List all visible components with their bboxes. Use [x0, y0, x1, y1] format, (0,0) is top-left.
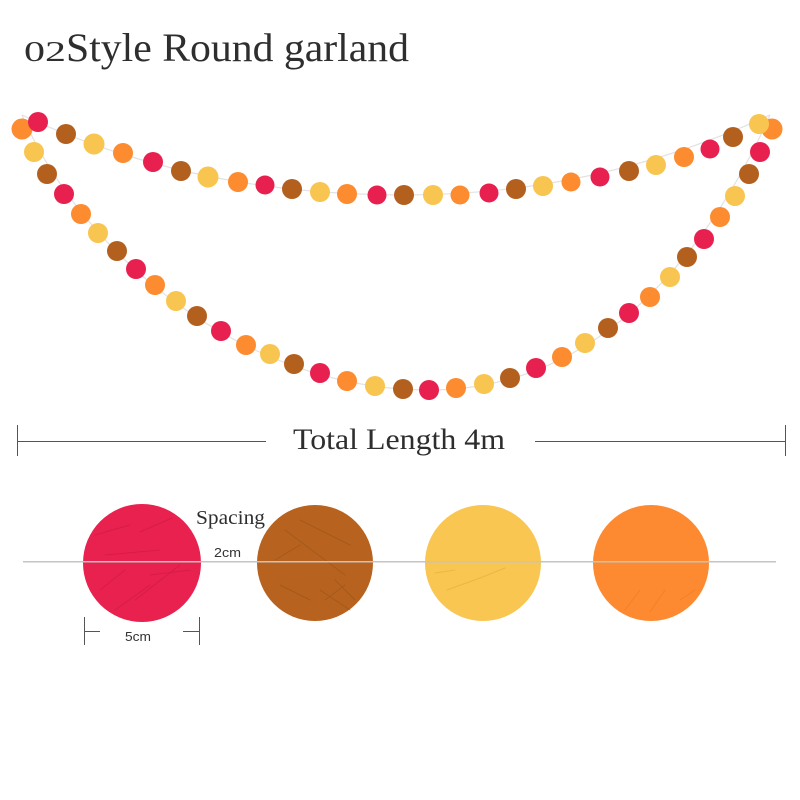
title: 02 — [24, 36, 66, 68]
2cm label: 2cm — [214, 545, 241, 560]
red sample disc — [83, 504, 201, 622]
total length label: Total Length 4m — [293, 423, 505, 456]
string line through discs — [23, 561, 776, 562]
garland: upper strand beads — [28, 112, 769, 205]
spacing label: Spacing — [196, 507, 265, 529]
disc width dimension — [84, 617, 200, 645]
total length dimension — [17, 423, 786, 456]
brown sample disc — [257, 505, 373, 621]
garland illustration — [12, 112, 782, 400]
garland: lower strand beads — [12, 118, 782, 400]
5cm label: 5cm — [125, 629, 151, 644]
title: Style Round garland — [66, 25, 409, 70]
orange sample disc — [593, 505, 709, 621]
yellow sample disc — [425, 505, 541, 621]
